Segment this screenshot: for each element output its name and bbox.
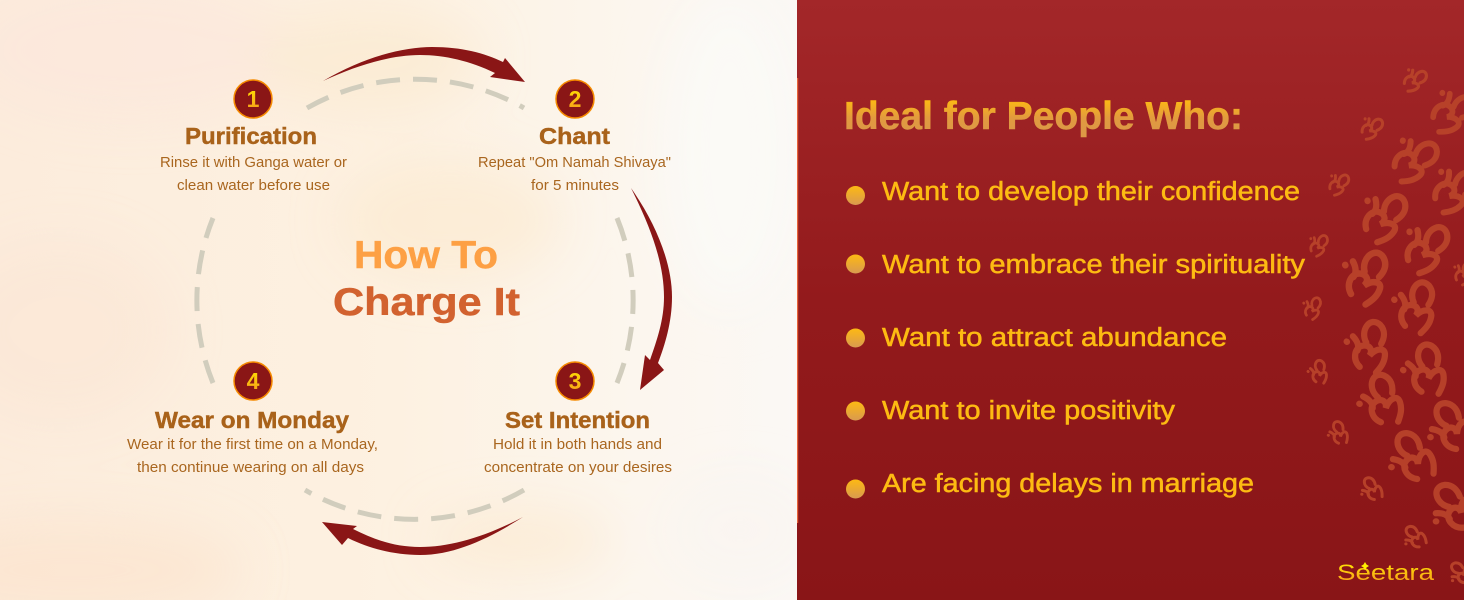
bullet 1: Want to develop their confidence [882,178,1300,206]
arrow: step 3 to step 4 [322,517,523,555]
step 4 description: then continue wearing on all days [137,460,364,476]
heading: How To: How To [354,234,498,277]
step 1 title: Purification [185,123,317,149]
step 3 badge: 3 [569,368,581,394]
step 2 description: for 5 minutes [531,178,619,194]
step 2 badge [556,80,594,118]
bullet 3: Want to attract abundance [882,324,1227,352]
step 2 description: Repeat "Om Namah Shivaya" [478,155,671,171]
step 3: Set Intention [484,362,672,476]
bullet 5: Are facing delays in marriage [882,470,1254,498]
step 3 badge [556,362,594,400]
decorative om symbol pattern [1301,70,1464,584]
panel: right maroon background [797,0,1464,600]
step 4 title: Wear on Monday [155,407,349,433]
step 4: Wear on Monday [127,362,378,476]
title: Ideal for People Who: Ideal for People Who: [844,95,1243,138]
step 2 title: Chant [539,123,610,149]
step 1 description: clean water before use [177,178,330,194]
step 2: Chant [478,80,671,194]
step 3 description: Hold it in both hands and [493,437,662,453]
step 4 badge: 4 [247,368,260,394]
step 4 badge [234,362,272,400]
step 2 description [478,155,671,194]
step 1: Purification [160,80,347,194]
arrow: step 2 to step 3 [631,188,672,390]
bullet 4: Want to invite positivity [882,397,1175,425]
step 1 description: Rinse it with Ganga water or [160,155,347,171]
step 1 badge [234,80,272,118]
dashed cycle ring [197,79,633,519]
bullet 2: Want to embrace their spirituality [882,251,1305,279]
step 2 badge: 2 [569,86,581,112]
logo: Seetara: Seetara [1337,560,1435,585]
heading: Charge It: Charge It [333,281,520,324]
list: ideal for [846,178,1305,498]
step 1 description [160,155,347,194]
arrow: step 1 to step 2 [323,47,525,82]
step 4 description: Wear it for the first time on a Monday, [127,437,378,453]
step 1 badge: 1 [247,86,260,112]
step 3 description: concentrate on your desires [484,460,672,476]
step 3 description [484,437,672,476]
vertical accent line [797,78,798,523]
step 3 title: Set Intention [505,407,650,433]
step 4 description [127,437,378,476]
panel: left watercolor background [0,0,810,600]
